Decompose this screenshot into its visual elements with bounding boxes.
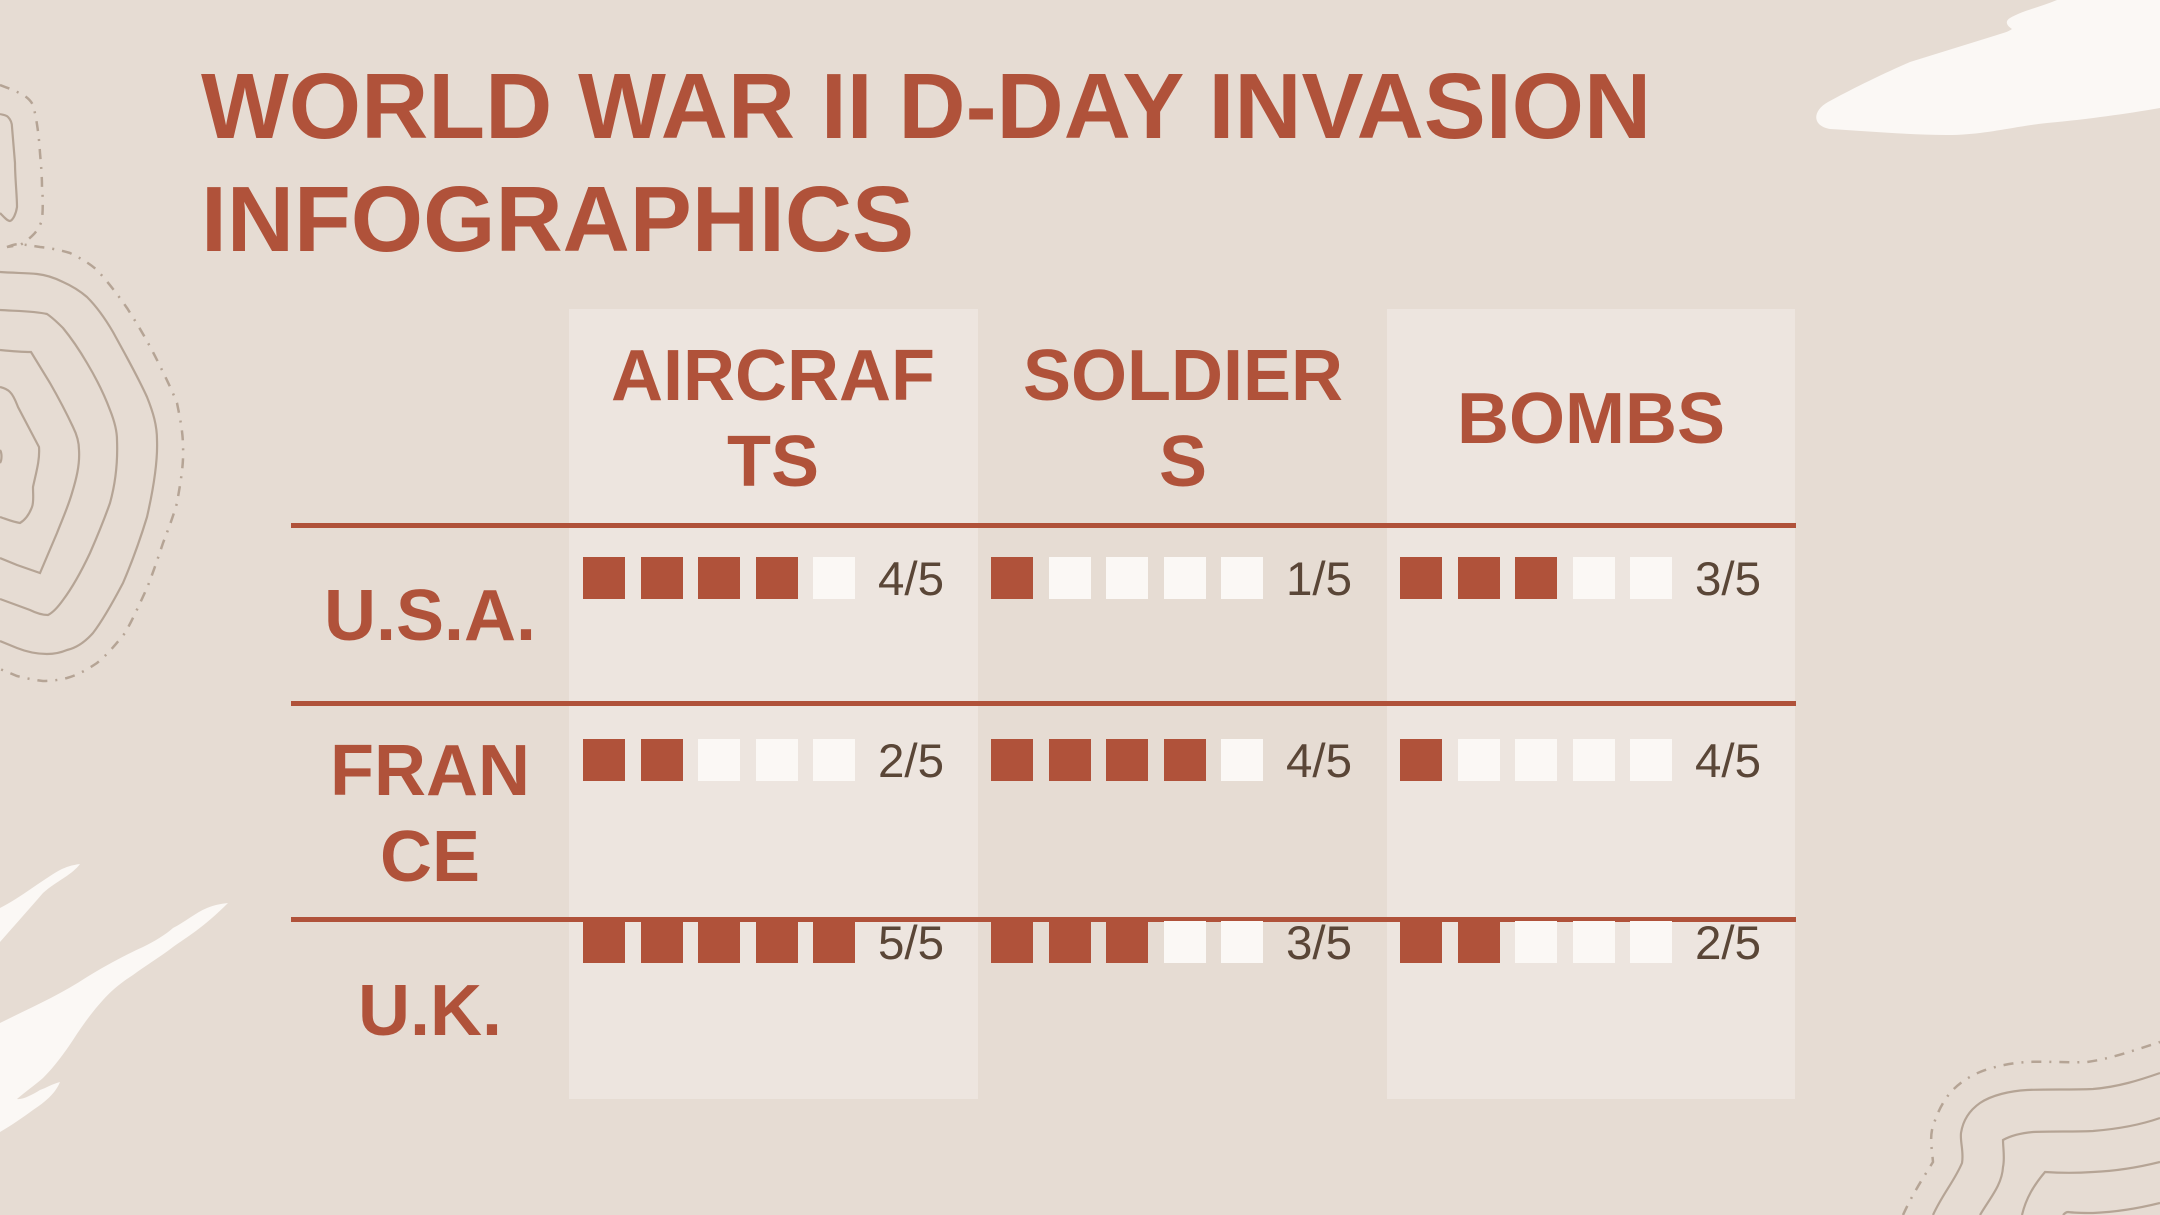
title	[201, 54, 1651, 271]
column heading: bombs: BOMBS	[1457, 379, 1725, 459]
column heading: soldiers: S	[1159, 422, 1207, 502]
rating: France soldiers 4/5: 4/5	[1286, 735, 1352, 788]
rating: U.S.A. soldiers 1/5: 1/5	[1286, 553, 1352, 606]
row label: U.K.: U.K.	[358, 971, 502, 1051]
rating: U.S.A. bombs 3/5: 3/5	[1695, 553, 1761, 606]
column heading: aircrafts: AIRCRAF	[611, 336, 935, 416]
rating: U.S.A. soldiers 1/5	[991, 553, 1352, 606]
rating: U.K. soldiers 3/5	[991, 917, 1352, 970]
row label: France: FRAN	[330, 731, 530, 811]
column heading: aircrafts	[611, 336, 935, 502]
row label: France: CE	[380, 817, 480, 897]
table column panel: bombs	[1387, 309, 1795, 1099]
rating: France soldiers 4/5	[991, 735, 1352, 788]
white brush shape: top right	[1816, 0, 2160, 135]
rating: U.S.A. bombs 3/5	[1400, 553, 1761, 606]
rating: France aircrafts 2/5	[583, 735, 944, 788]
rating: U.K. bombs 2/5	[1400, 917, 1761, 970]
table rule: under U.S.A.	[291, 701, 1796, 706]
rating: U.S.A. aircrafts 4/5	[583, 553, 944, 606]
rating: France aircrafts 2/5: 2/5	[878, 735, 944, 788]
rating: France bombs 4/5: 4/5	[1695, 735, 1761, 788]
row label: France	[330, 731, 530, 897]
column heading: aircrafts: TS	[727, 422, 819, 502]
rating: U.S.A. aircrafts 4/5: 4/5	[878, 553, 944, 606]
title: INFOGRAPHICS	[201, 167, 914, 271]
row label: U.S.A.: U.S.A.	[324, 576, 536, 656]
contour lines: left side	[0, 85, 183, 681]
table column panel: aircrafts	[569, 309, 978, 1099]
white brush shapes: lower left	[0, 864, 228, 1132]
column heading: soldiers: SOLDIER	[1023, 336, 1343, 416]
rating: U.K. soldiers 3/5: 3/5	[1286, 917, 1352, 970]
rating: France bombs 4/5	[1400, 735, 1761, 788]
table rule: under France	[291, 917, 1796, 922]
column heading: soldiers	[1023, 336, 1343, 502]
rating: U.K. aircrafts 5/5: 5/5	[878, 917, 944, 970]
table rule: under header	[291, 523, 1796, 528]
rating: U.K. bombs 2/5: 2/5	[1695, 917, 1761, 970]
contour lines: bottom right	[1903, 1042, 2160, 1215]
title: WORLD WAR II D-DAY INVASION	[201, 54, 1651, 158]
rating: U.K. aircrafts 5/5	[583, 917, 944, 970]
